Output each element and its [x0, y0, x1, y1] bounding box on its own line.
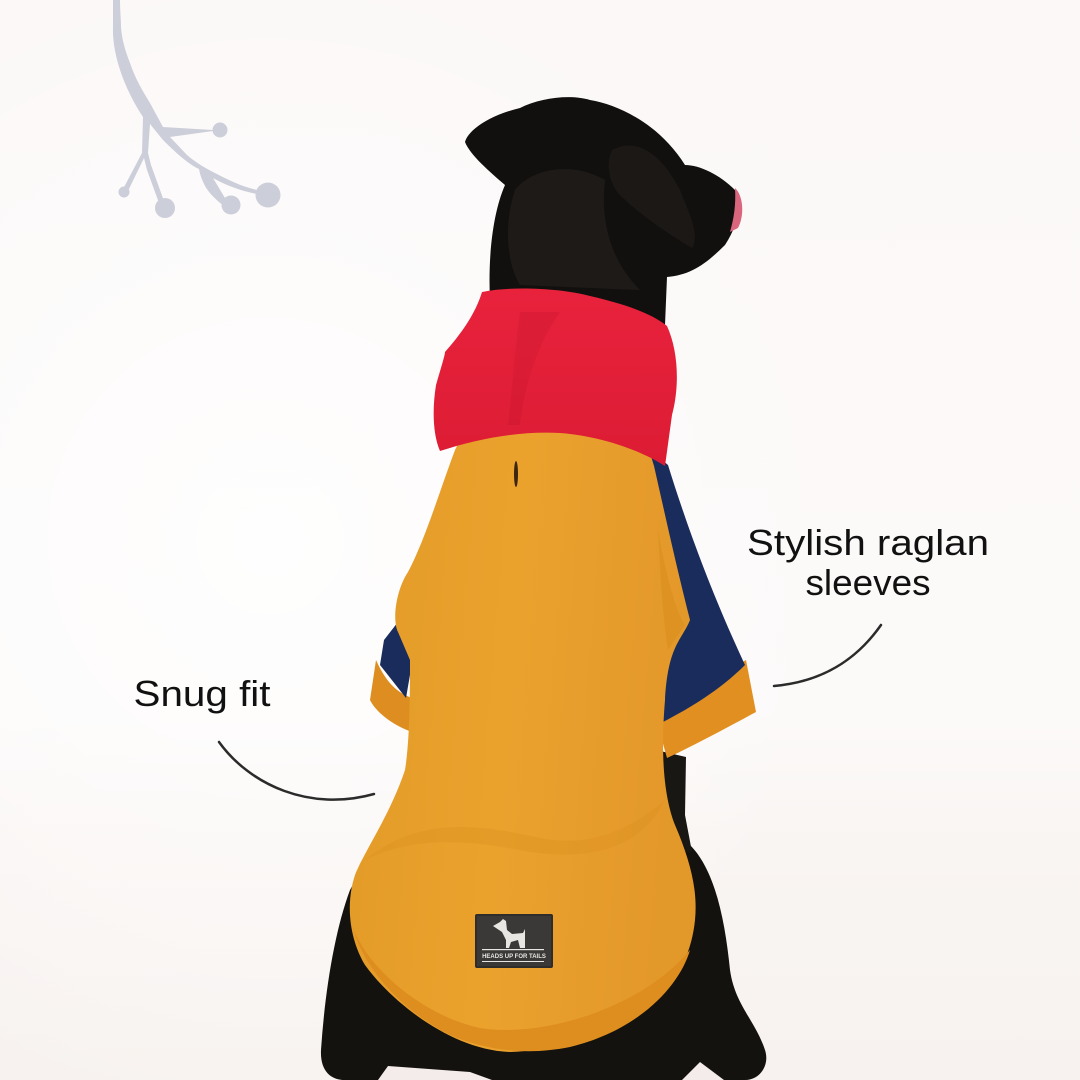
dog neck fur highlight: [508, 169, 640, 290]
dog head and neck: [465, 97, 738, 325]
dog lower body and legs: [321, 800, 766, 1080]
dog: [321, 97, 766, 1080]
floor gaps between legs: [378, 1066, 492, 1080]
sleeve seam: [658, 530, 685, 650]
navy raglan right sleeve: [650, 450, 745, 722]
arrow curve: [219, 742, 374, 800]
heading: Stylish raglan: [747, 522, 989, 563]
shirt hem ribbing: [352, 925, 690, 1051]
icon: dog logo: [493, 919, 525, 948]
brand lines: [482, 949, 544, 950]
dog hind leg behind shirt: [656, 750, 692, 852]
shirt fold shadows: [365, 800, 665, 860]
icon: decorative branch: [113, 0, 280, 218]
dog ear: [609, 146, 695, 248]
red hood: [434, 289, 677, 466]
heading: Snug fit: [134, 673, 270, 714]
arrow curve: [774, 625, 881, 686]
callout: raglan sleeves: sleeves: [806, 562, 930, 603]
small hole: [514, 461, 518, 487]
callout: snug fit: [134, 673, 374, 800]
hood fold shadow: [508, 312, 560, 425]
navy left sleeve: [380, 622, 416, 698]
black woven label: [475, 914, 553, 968]
callout: raglan sleeves: [747, 522, 989, 686]
brand name: HEADS UP FOR TAILS: [482, 954, 546, 960]
dog tongue: [730, 188, 742, 232]
orange right cuff: [655, 660, 756, 758]
orange shirt body: [350, 420, 696, 1052]
hoodie: [350, 289, 756, 1052]
orange left cuff: [370, 660, 412, 732]
